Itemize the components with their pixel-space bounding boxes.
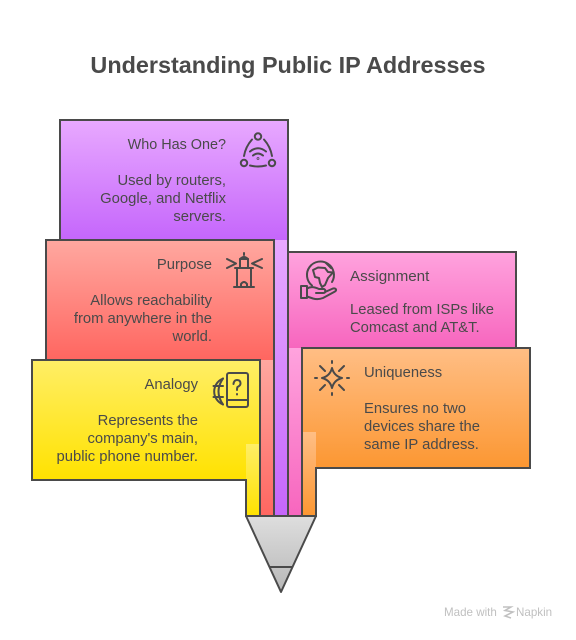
text: who has one description: servers.	[173, 209, 226, 225]
text: purpose description: Allows reachability	[90, 293, 213, 309]
icon: wifi network	[241, 133, 275, 166]
heading: assignment: Assignment	[350, 268, 430, 285]
icon: globe in hand	[301, 261, 336, 299]
panel: who has one	[60, 120, 288, 516]
heading: analogy: Analogy	[145, 377, 199, 393]
text: analogy description: Represents the	[98, 413, 198, 429]
watermark	[444, 606, 552, 619]
text: who has one description: Used by routers,	[117, 173, 226, 189]
icon: sparkle	[315, 361, 349, 395]
icon: napkin logo	[503, 607, 513, 618]
heading: purpose: Purpose	[157, 257, 212, 273]
text: uniqueness description: same IP address.	[364, 437, 479, 453]
watermark: Made with	[444, 606, 497, 619]
panel: uniqueness	[302, 348, 530, 516]
text: analogy description: public phone number.	[56, 449, 198, 465]
text: uniqueness description: devices share the	[364, 419, 480, 435]
icon: lighthouse	[227, 253, 262, 287]
text: assignment description: Comcast and AT&T.	[350, 320, 480, 336]
watermark: Napkin	[516, 606, 552, 619]
text: analogy description: company's main,	[87, 431, 198, 447]
text: uniqueness description: Ensures no two	[364, 401, 466, 417]
text: who has one description: Google, and Netflix	[100, 191, 227, 207]
icon: phone with globe	[214, 373, 248, 407]
panel: assignment	[288, 252, 516, 516]
panel: purpose	[46, 240, 274, 516]
title: Understanding Public IP Addresses	[90, 52, 486, 78]
text: assignment description: Leased from ISPs like	[350, 302, 494, 318]
panel: analogy	[32, 360, 260, 516]
heading: who has one: Who Has One?	[128, 137, 226, 153]
text: purpose description: from anywhere in the	[74, 311, 212, 327]
pencil tip	[246, 516, 316, 592]
heading: uniqueness: Uniqueness	[364, 365, 442, 381]
text: purpose description: world.	[172, 329, 212, 345]
